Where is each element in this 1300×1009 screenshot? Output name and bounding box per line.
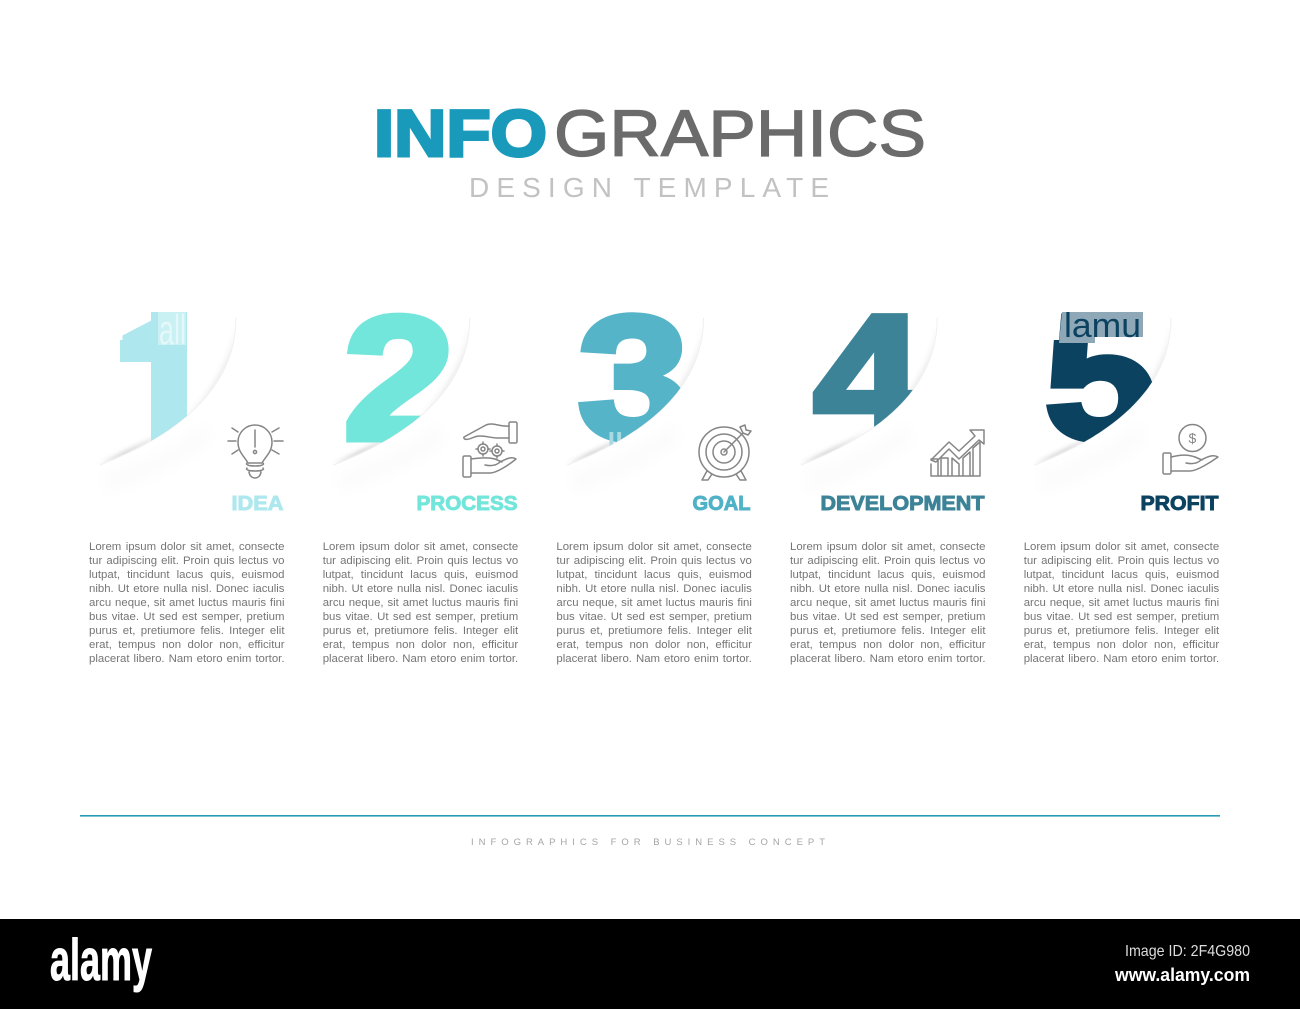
label: idea: IDEA (232, 493, 284, 515)
text block: goal: purus et, pretiumore felis. Integer elit (556, 625, 752, 637)
text block: profit: nibh. Ut etore nulla nisl. Donec iaculis (1024, 583, 1219, 595)
text block: development: nibh. Ut etore nulla nisl. Donec iaculis (790, 583, 986, 595)
watermark bar: Image ID: 2F4G980 (1125, 943, 1250, 960)
text block: process: nibh. Ut etore nulla nisl. Donec iaculis (323, 583, 518, 595)
text block: goal: lutpat, tincidunt lacus quis, euismod (556, 569, 752, 581)
text block: profit: Lorem ipsum dolor sit amet, consecte (1024, 541, 1219, 553)
text block: goal: Lorem ipsum dolor sit amet, consecte (556, 541, 752, 553)
step 4: number (801, 313, 938, 466)
text block: development: lutpat, tincidunt lacus quis, euismod (790, 569, 986, 581)
text block: idea: Lorem ipsum dolor sit amet, consecte (89, 541, 284, 553)
text block: goal: tur adipiscing elit. Proin quis lectus vo (556, 555, 752, 567)
icon: hands with gears (463, 422, 517, 477)
text block: development: erat, tempus non dolor non, efficitur (790, 639, 986, 651)
text block: process: placerat libero. Nam etoro enim tortor. (323, 653, 518, 665)
title: INFO (374, 96, 547, 170)
step 5: number: lamu (1064, 307, 1141, 345)
text block: goal: arcu neque, sit amet luctus mauris fini (556, 597, 752, 609)
step 2: number: 2 (343, 280, 455, 476)
title (374, 96, 926, 170)
subtitle: DESIGN TEMPLATE (469, 172, 829, 203)
icon: hand with coin (1163, 424, 1218, 474)
text block: process: arcu neque, sit amet luctus mauris fini (323, 597, 518, 609)
icon: hand with coin: $ (1188, 430, 1196, 446)
step 1: number: all (159, 306, 186, 353)
text block: goal: nibh. Ut etore nulla nisl. Donec iaculis (556, 583, 752, 595)
text block: profit: purus et, pretiumore felis. Integer elit (1024, 625, 1219, 637)
watermark bar: alamy (50, 928, 152, 993)
text block: development: bus vitae. Ut sed est semper, pretium (790, 611, 986, 623)
text block: development (790, 541, 986, 665)
text block: idea: purus et, pretiumore felis. Integer elit (89, 625, 284, 637)
text block: idea: erat, tempus non dolor non, efficitur (89, 639, 284, 651)
text block: profit: tur adipiscing elit. Proin quis lectus vo (1024, 555, 1219, 567)
text block: idea: nibh. Ut etore nulla nisl. Donec iaculis (89, 583, 284, 595)
text block: idea: bus vitae. Ut sed est semper, pretium (89, 611, 284, 623)
label: development: DEVELOPMENT (820, 493, 984, 515)
text block: development: purus et, pretiumore felis. Integer elit (790, 625, 986, 637)
step 3: number: 3 (578, 279, 689, 475)
text block: goal: erat, tempus non dolor non, efficitur (556, 639, 752, 651)
step 5: number (1035, 312, 1172, 466)
text block: process (322, 541, 518, 665)
text block: idea: lutpat, tincidunt lacus quis, euismod (89, 569, 284, 581)
text block: goal (556, 541, 752, 665)
icon: target (699, 425, 751, 480)
text block: development: Lorem ipsum dolor sit amet, consecte (790, 541, 986, 553)
text block: goal: bus vitae. Ut sed est semper, pretium (556, 611, 752, 623)
text block: profit: bus vitae. Ut sed est semper, pretium (1024, 611, 1219, 623)
text block: process: tur adipiscing elit. Proin quis lectus vo (323, 555, 518, 567)
step 1: number: 1 (109, 278, 234, 479)
step 3: number: ll (608, 427, 623, 458)
watermark bar: www.alamy.com (1114, 965, 1250, 985)
label: profit: PROFIT (1140, 493, 1218, 515)
step 3: number (568, 312, 704, 466)
text block: profit: arcu neque, sit amet luctus mauris fini (1024, 597, 1219, 609)
text block: profit: erat, tempus non dolor non, efficitur (1024, 639, 1219, 651)
text block: idea: arcu neque, sit amet luctus mauris fini (89, 597, 284, 609)
step 5: number: 5 (1044, 279, 1156, 475)
text block: development: tur adipiscing elit. Proin quis lectus vo (790, 555, 986, 567)
icon: light bulb (228, 425, 283, 478)
step 2: number (334, 312, 470, 466)
text block: development: placerat libero. Nam etoro enim tortor. (790, 653, 986, 665)
text block: process: erat, tempus non dolor non, efficitur (323, 639, 518, 651)
text block: process: purus et, pretiumore felis. Integer elit (323, 625, 518, 637)
text block: profit: placerat libero. Nam etoro enim tortor. (1024, 653, 1219, 665)
text block: profit (1024, 541, 1220, 665)
label: process: PROCESS (416, 493, 518, 515)
text block: process: lutpat, tincidunt lacus quis, euismod (323, 569, 518, 581)
step 4: number: 4 (814, 280, 923, 472)
footer caption: INFOGRAPHICS FOR BUSINESS CONCEPT (471, 837, 825, 848)
title: GRAPHICS (554, 96, 926, 170)
text block: development: arcu neque, sit amet luctus mauris fini (790, 597, 986, 609)
text block: idea: tur adipiscing elit. Proin quis lectus vo (89, 555, 284, 567)
text block: process: Lorem ipsum dolor sit amet, consecte (323, 541, 518, 553)
text block: goal: placerat libero. Nam etoro enim tortor. (556, 653, 752, 665)
text block: profit: lutpat, tincidunt lacus quis, euismod (1024, 569, 1219, 581)
icon: growth chart (931, 430, 984, 476)
text block: idea (89, 541, 284, 665)
text block: idea: placerat libero. Nam etoro enim tortor. (89, 653, 284, 665)
label: goal: GOAL (692, 493, 750, 515)
watermark bar (0, 919, 1300, 1009)
text block: process: bus vitae. Ut sed est semper, pretium (323, 611, 518, 623)
